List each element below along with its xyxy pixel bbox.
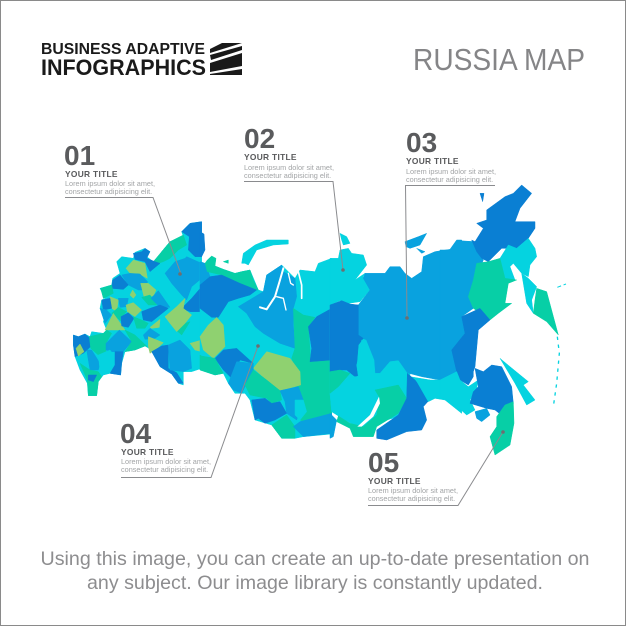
callout 02: YOUR TITLE — [244, 152, 297, 162]
map: Sakhalin — [500, 358, 535, 405]
callout 04: consectetur adipisicing elit. — [121, 465, 208, 474]
callout 04: YOUR TITLE — [121, 447, 174, 457]
map: Severnaya Zemlya — [340, 233, 350, 245]
description text — [40, 548, 590, 594]
logo — [41, 41, 242, 80]
logo text — [41, 41, 206, 80]
callout 03: consectetur adipisicing elit. — [406, 175, 493, 184]
callout 02: 02 — [244, 123, 275, 154]
callout 01: consectetur adipisicing elit. — [65, 187, 152, 196]
description text: Using this image, you can create an up-to-date presentation on — [40, 548, 590, 570]
map: Urals and western Siberia regions — [200, 232, 332, 438]
callout 05 — [368, 430, 505, 506]
callout 03 — [405, 127, 496, 320]
callout 04: 04 — [120, 418, 152, 449]
callout 05: 05 — [368, 447, 399, 478]
description text: any subject. Our image library is constantly updated. — [87, 572, 543, 594]
callout 04: Lorem ipsum dolor sit amet, — [121, 457, 211, 466]
map: Novaya Zemlya — [242, 240, 288, 265]
callout 01: 01 — [64, 140, 95, 171]
map: New Siberian Islands — [405, 233, 427, 248]
callout 02 — [244, 123, 345, 272]
map: Commander islands — [557, 284, 566, 287]
callout 01: Lorem ipsum dolor sit amet, — [65, 179, 155, 188]
callout 03: Lorem ipsum dolor sit amet, — [406, 167, 496, 176]
russia map — [73, 185, 566, 455]
callout 02: Lorem ipsum dolor sit amet, — [244, 163, 334, 172]
logo text: BUSINESS ADAPTIVE — [41, 41, 205, 58]
map: far east regions — [440, 185, 566, 455]
callout 01 — [64, 140, 182, 276]
callout 03: YOUR TITLE — [406, 156, 459, 166]
map: western regions — [73, 222, 202, 396]
map: Kuril islands — [553, 337, 559, 407]
title: RUSSIA MAP — [413, 43, 585, 77]
callout 04 — [120, 344, 260, 478]
map: river branches — [277, 272, 302, 310]
map: central Siberia regions — [330, 233, 462, 440]
callout 01: YOUR TITLE — [65, 169, 118, 179]
callout 03: 03 — [406, 127, 437, 158]
logo text: INFOGRAPHICS — [41, 55, 206, 80]
callout 02: consectetur adipisicing elit. — [244, 171, 331, 180]
logo icon: stripes — [210, 43, 242, 75]
map: Lake Baikal — [357, 397, 380, 427]
callout 05: Lorem ipsum dolor sit amet, — [368, 486, 458, 495]
callout 05: YOUR TITLE — [368, 476, 421, 486]
callout 05: consectetur adipisicing elit. — [368, 494, 455, 503]
map: Ob river — [260, 268, 283, 309]
